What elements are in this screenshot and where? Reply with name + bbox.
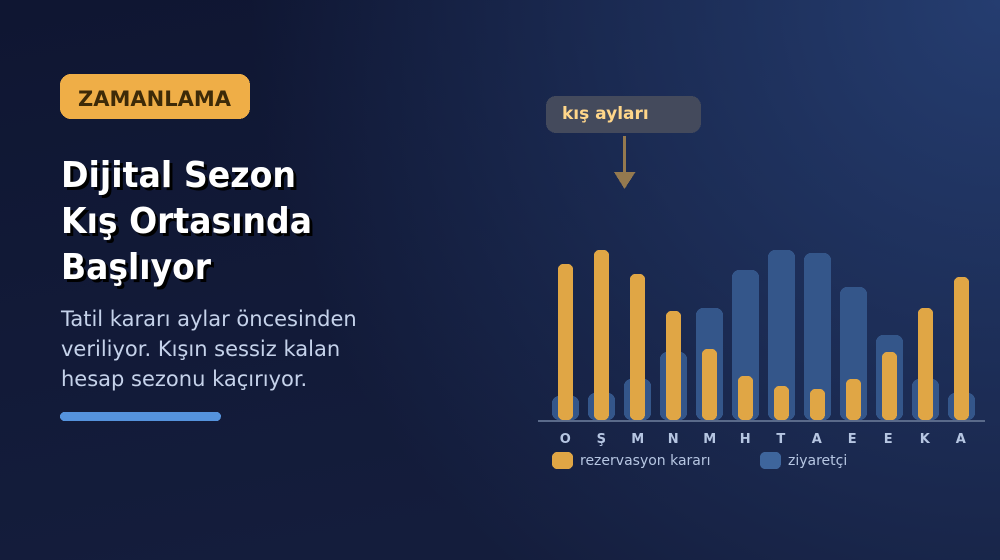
month labels: Ş xyxy=(597,432,606,447)
accent bar xyxy=(60,412,221,421)
callout: kış ayları: kış ayları xyxy=(562,104,649,124)
callout: kış ayları xyxy=(546,96,701,133)
month labels: M xyxy=(631,432,645,447)
badge: ZAMANLAMA xyxy=(60,74,250,119)
title: Dijital Sezon xyxy=(64,158,299,199)
legend xyxy=(552,452,847,469)
visitor bars xyxy=(552,250,975,420)
month labels: M xyxy=(703,432,717,447)
month labels: A xyxy=(956,432,966,447)
bar chart xyxy=(538,250,985,447)
title: Kış Ortasında xyxy=(64,204,315,245)
month labels: T xyxy=(776,432,786,447)
month labels: N xyxy=(668,432,679,447)
legend: ziyaretçi: ziyaretçi xyxy=(788,453,847,469)
month labels: O xyxy=(560,432,571,447)
title: Başlıyor xyxy=(64,250,214,291)
month labels: H xyxy=(740,432,751,447)
badge: ZAMANLAMA: ZAMANLAMA xyxy=(78,87,232,111)
description text: hesap sezonu kaçırıyor. xyxy=(61,367,307,391)
arrow: callout to winter months xyxy=(614,136,636,189)
title: Kış Ortasında xyxy=(61,201,312,242)
axis line xyxy=(538,420,985,422)
description text: veriliyor. Kışın sessiz kalan xyxy=(61,337,340,361)
title xyxy=(61,155,315,291)
title: Başlıyor xyxy=(61,247,211,288)
month labels: E xyxy=(884,432,893,447)
month labels: E xyxy=(848,432,857,447)
booking decision bars xyxy=(558,250,969,420)
month labels: A xyxy=(812,432,822,447)
description text: Tatil kararı aylar öncesinden xyxy=(60,307,357,331)
month labels xyxy=(560,432,966,447)
month labels: K xyxy=(920,432,931,447)
legend: ziyaretçi xyxy=(760,452,847,469)
description text xyxy=(60,307,357,391)
legend: rezervasyon kararı: rezervasyon kararı xyxy=(580,453,711,469)
title: Dijital Sezon xyxy=(61,155,296,196)
